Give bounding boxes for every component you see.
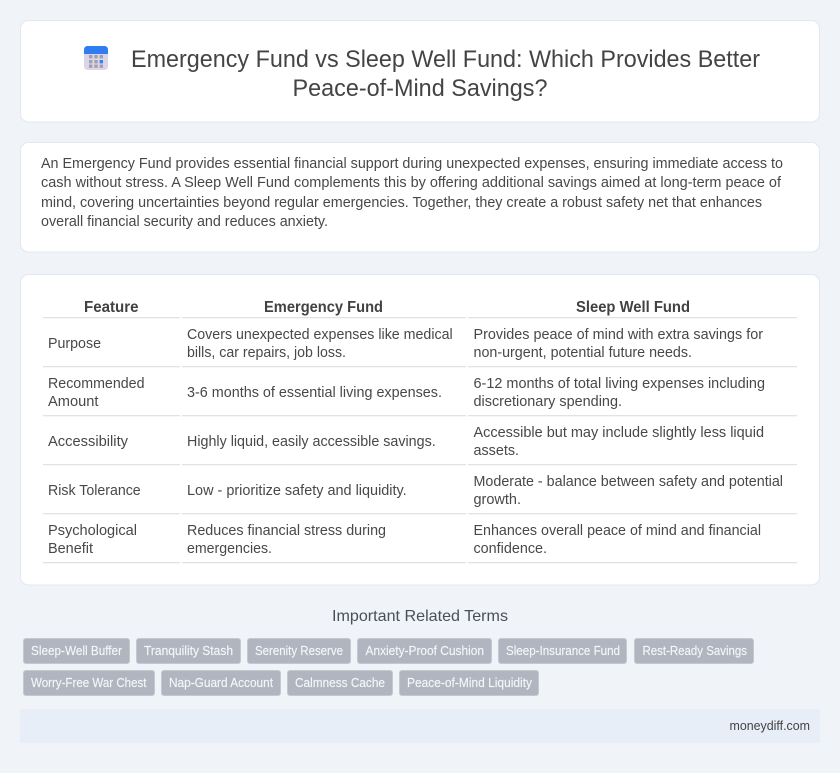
footer <box>20 709 820 743</box>
tag: Tranquility Stash <box>144 644 233 658</box>
table row: psychological benefit: Enhances overall peace of mind and financial <box>474 523 761 539</box>
table row: accessibility: Accessibility <box>48 434 129 450</box>
title: Peace-of-Mind Savings? <box>292 75 548 102</box>
text block: introduction paragraph: cash without stress. A Sleep Well Fund complements this by offering additional savings aimed at long-term peace of <box>41 175 782 191</box>
table row: psychological benefit: Benefit <box>48 541 93 557</box>
table row: recommended amount <box>43 376 797 416</box>
table row: recommended amount: discretionary spending. <box>474 394 622 410</box>
tag <box>498 638 626 664</box>
table header row: Emergency Fund <box>264 299 383 316</box>
table row: recommended amount: Recommended <box>48 376 144 392</box>
table row: psychological benefit <box>43 523 797 563</box>
table row: risk tolerance: Risk Tolerance <box>48 483 141 499</box>
table row: accessibility: Highly liquid, easily accessible savings. <box>187 434 436 450</box>
tag <box>634 638 754 664</box>
table row: purpose <box>43 327 797 367</box>
icon: calendar <box>84 46 108 70</box>
text block: introduction paragraph <box>41 156 783 230</box>
table row: recommended amount: 6-12 months of total living expenses including <box>474 376 765 392</box>
table row: purpose: Provides peace of mind with extra savings for <box>474 327 763 343</box>
table row: purpose: non-urgent, potential future needs. <box>474 345 692 361</box>
tag list: related terms <box>24 638 754 696</box>
table row: accessibility: assets. <box>474 443 519 459</box>
tag: Calmness Cache <box>295 676 385 690</box>
table row: psychological benefit: confidence. <box>474 541 547 557</box>
text block: introduction paragraph: mind, covering uncertainties beyond regular emergencies. Together, they create a robust safety net that enhances <box>41 195 762 211</box>
tag <box>248 638 350 664</box>
table row: purpose: Covers unexpected expenses like medical <box>187 327 453 343</box>
title <box>131 46 760 102</box>
tag <box>400 670 538 696</box>
table header row: Feature <box>84 299 139 316</box>
footer: moneydiff.com <box>730 719 810 733</box>
table row: accessibility: Accessible but may include slightly less liquid <box>474 425 764 441</box>
tag: Nap-Guard Account <box>169 676 273 690</box>
title: Emergency Fund vs Sleep Well Fund: Which Provides Better <box>131 46 760 73</box>
tag: Serenity Reserve <box>255 644 343 658</box>
tag: Anxiety-Proof Cushion <box>366 644 484 658</box>
table row: psychological benefit: emergencies. <box>187 541 272 557</box>
table row: psychological benefit: Reduces financial stress during <box>187 523 386 539</box>
tag: Worry-Free War Chest <box>31 676 147 690</box>
table row: accessibility <box>43 425 797 465</box>
table row: purpose: Purpose <box>48 336 101 352</box>
table row: psychological benefit: Psychological <box>48 523 137 539</box>
tag <box>24 638 130 664</box>
table row: recommended amount: Amount <box>48 394 98 410</box>
table row: risk tolerance <box>43 474 797 514</box>
tag <box>288 670 392 696</box>
tag <box>136 638 240 664</box>
tag <box>24 670 154 696</box>
tag <box>162 670 280 696</box>
tag: Sleep-Well Buffer <box>31 644 122 658</box>
table row: risk tolerance: Low - prioritize safety and liquidity. <box>187 483 407 499</box>
panel: comparison table <box>20 274 820 585</box>
table header row: Sleep Well Fund <box>576 299 690 316</box>
table row: recommended amount: 3-6 months of essential living expenses. <box>187 385 442 401</box>
tag: Peace-of-Mind Liquidity <box>407 676 533 690</box>
panel: header <box>20 20 820 122</box>
heading: important related terms: Important Related Terms <box>332 608 508 625</box>
tag: Sleep-Insurance Fund <box>506 644 620 658</box>
text block: introduction paragraph: An Emergency Fund provides essential financial support during unexpected expenses, ensuring immediate access to <box>41 156 783 172</box>
tag <box>358 638 492 664</box>
tag: Rest-Ready Savings <box>642 644 747 658</box>
table header row <box>43 299 797 318</box>
text block: introduction paragraph: overall financial security and reduces anxiety. <box>41 214 328 230</box>
table row: risk tolerance: Moderate - balance between safety and potential <box>474 474 783 490</box>
table row: risk tolerance: growth. <box>474 492 521 508</box>
table row: purpose: bills, car repairs, job loss. <box>187 345 346 361</box>
panel: introduction <box>20 142 820 252</box>
